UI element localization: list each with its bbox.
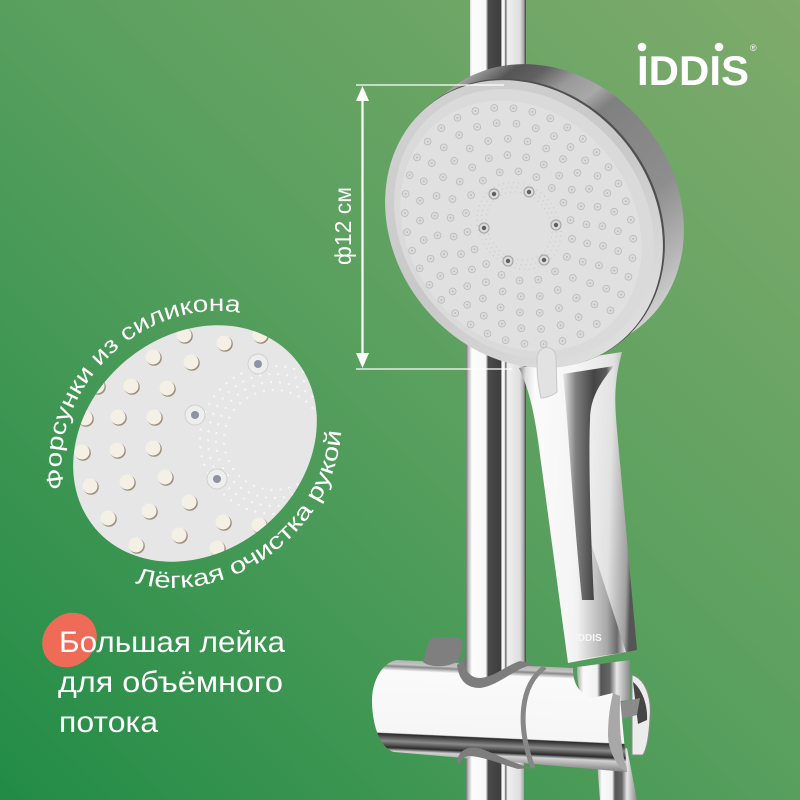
upper rail collar bbox=[457, 660, 534, 688]
inner face bbox=[351, 52, 691, 400]
large jets bbox=[185, 354, 268, 489]
handle logo: iDDIS bbox=[575, 633, 602, 644]
rail through upper notch bbox=[463, 655, 526, 679]
heading: Большая лейка bbox=[59, 626, 285, 659]
detail photo bbox=[73, 325, 317, 562]
central jets bbox=[479, 187, 561, 266]
hand shower handle bbox=[519, 352, 637, 704]
logo: IDDIS bbox=[637, 47, 749, 94]
heading: для объёмного bbox=[58, 666, 283, 699]
outer rim bbox=[328, 24, 720, 424]
hose bbox=[597, 748, 637, 800]
shower rail bbox=[465, 0, 526, 800]
heading: потока bbox=[59, 706, 158, 739]
heading bbox=[58, 626, 285, 739]
nozzle shadows bbox=[75, 328, 269, 557]
ivory nozzles bbox=[74, 328, 268, 556]
dark seam bbox=[329, 22, 722, 424]
heading accent blob bbox=[31, 601, 108, 679]
rail through lower notch bbox=[465, 753, 524, 790]
light face bbox=[340, 37, 708, 411]
clamp knob bbox=[423, 637, 463, 666]
handle lower shading bbox=[576, 540, 626, 660]
curved caption: bottom: Лёгкая очистка рукой bbox=[135, 432, 342, 588]
diameter label: ф12 см bbox=[330, 187, 356, 265]
handle neck bbox=[577, 660, 630, 704]
wall bracket bbox=[618, 675, 650, 755]
dimension arrow bbox=[356, 86, 369, 368]
nozzle rings bbox=[358, 62, 680, 390]
clamp band bbox=[523, 667, 545, 768]
handle dark reflection bbox=[563, 366, 614, 600]
diameter dimension bbox=[356, 85, 512, 369]
shower head face bbox=[328, 22, 722, 424]
logo: ® bbox=[750, 43, 757, 53]
handle release tab bbox=[537, 348, 557, 398]
micro dot arcs bbox=[199, 365, 317, 515]
curved caption: top: Форсунки из силикона bbox=[46, 298, 240, 488]
lower rail collar bbox=[457, 748, 532, 769]
clamp body bbox=[372, 637, 627, 790]
shower head chrome back bbox=[349, 8, 741, 408]
extension lines bbox=[356, 85, 512, 369]
clamp end cap bbox=[608, 693, 627, 772]
